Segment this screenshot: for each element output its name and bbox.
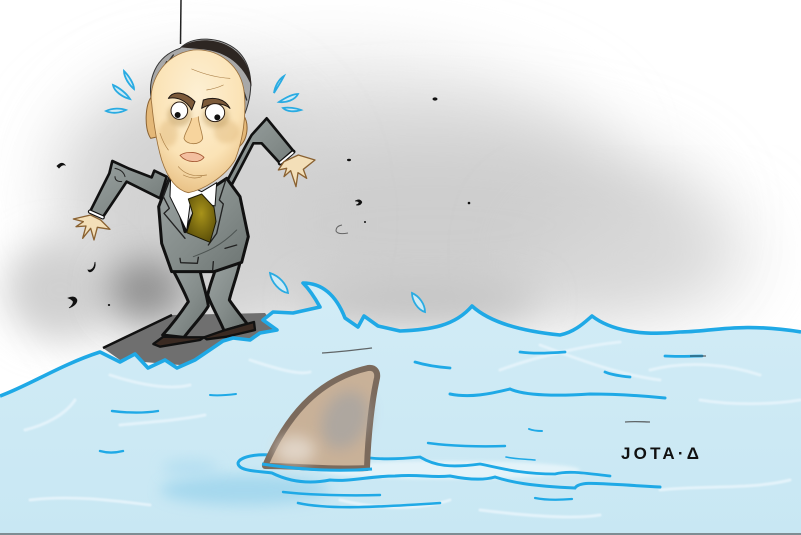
cheek shading: [214, 120, 239, 143]
ink specks on wall: [57, 97, 470, 308]
white shirt: [170, 177, 217, 231]
page border: [0, 533, 801, 535]
grey-black water marks: [322, 348, 706, 422]
darker water shadow: [160, 475, 330, 505]
left arm and cuff: [90, 161, 167, 217]
signature: JOTA·Δ: [621, 444, 699, 463]
pale foam patch around the fin: [320, 461, 580, 479]
sweat drops: [106, 71, 425, 312]
blue ripple strokes: [100, 352, 702, 507]
nose: [184, 117, 203, 144]
tie: [187, 194, 216, 242]
face: [151, 50, 245, 193]
pale water highlights: [25, 342, 800, 517]
trouser legs: [163, 263, 247, 337]
man in grey suit: [73, 39, 315, 347]
rock platform: [103, 313, 278, 365]
right hand: [278, 155, 315, 187]
ears: [146, 97, 158, 138]
eyes: [171, 102, 225, 122]
mouth: [180, 152, 204, 162]
eye shadow: [167, 104, 191, 126]
sea with waves: [0, 283, 801, 535]
shark fin: [262, 368, 378, 470]
head: [146, 39, 252, 193]
hair: [151, 39, 251, 113]
jacket: [159, 177, 248, 272]
left hand: [73, 215, 110, 240]
wire from the top: [180, 0, 182, 44]
shoes: [153, 322, 255, 347]
right arm and cuff: [227, 118, 294, 185]
eyebrows: [168, 93, 195, 110]
forehead and chin lines: [160, 69, 230, 178]
